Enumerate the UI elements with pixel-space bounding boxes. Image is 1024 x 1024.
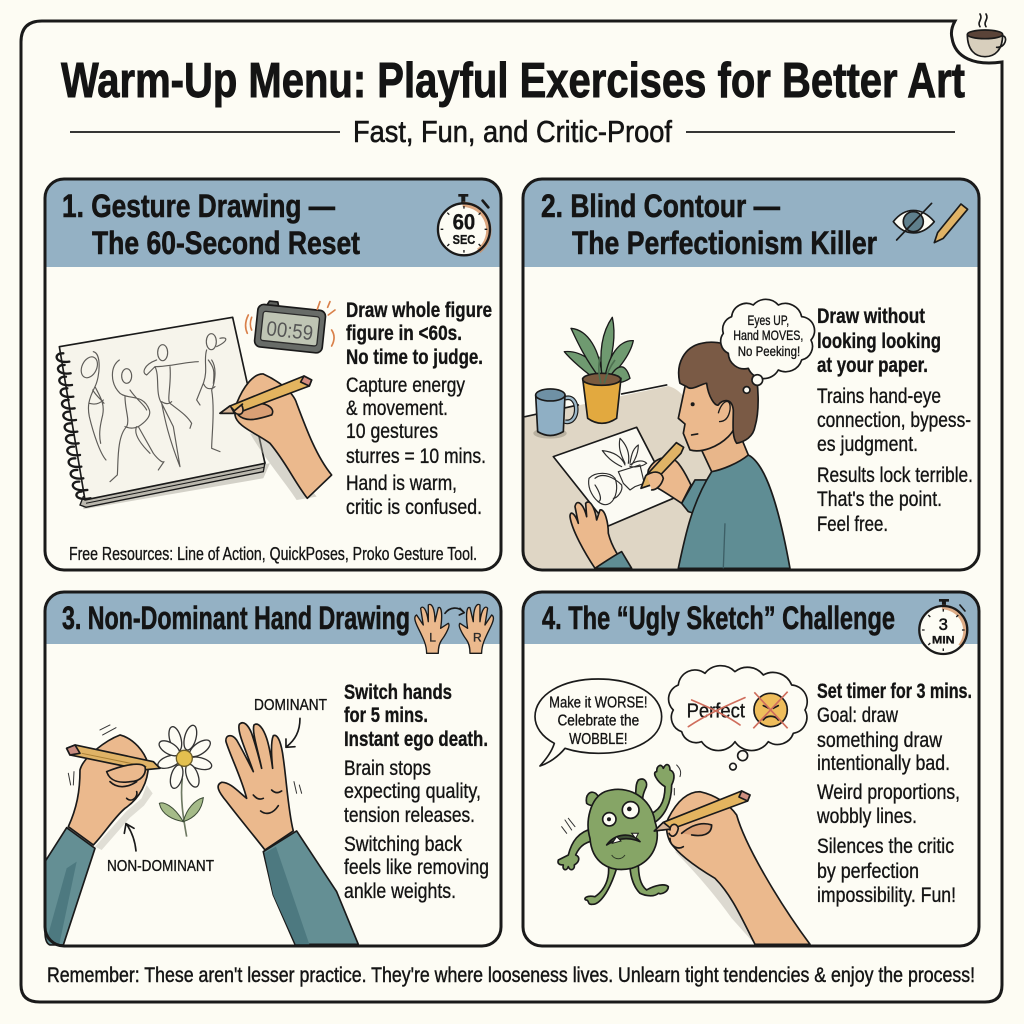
text block: gesture instructions: critic is confused.: [346, 496, 482, 519]
text block: gesture instructions: & movement.: [346, 397, 448, 420]
label: dominant: DOMINANT: [254, 697, 327, 714]
text block: non-dominant instructions: tension releases.: [344, 804, 475, 827]
text block: gesture instructions: figure in <60s.: [346, 322, 462, 345]
text block: gesture instructions: [346, 299, 492, 519]
text block: non-dominant instructions: ankle weights.: [344, 880, 456, 903]
text block: non-dominant instructions: Switch hands: [344, 681, 452, 704]
icon: crossed eye and pencil: [893, 203, 968, 243]
subtitle: Fast, Fun, and Critic-Proof: [353, 114, 672, 149]
text block: ugly sketch instructions: wobbly lines.: [816, 805, 917, 828]
text block: blind contour instructions: looking looking: [817, 330, 941, 353]
hand shadow: [675, 852, 755, 944]
text block: blind contour instructions: That's the point.: [817, 488, 942, 511]
timer: [254, 300, 327, 353]
hair: [679, 342, 758, 443]
text block: ugly sketch instructions: Set timer for 3 mins.: [817, 680, 972, 703]
icon: 60 second stopwatch: SEC: [453, 233, 475, 247]
drawing hand: [667, 792, 810, 944]
dominant hand: [218, 723, 293, 850]
neck and head: [700, 423, 748, 472]
text block: blind contour instructions: Draw without: [817, 305, 925, 328]
illustration: monster, bubbles and drawing hand: WOBBLE!: [569, 731, 627, 748]
monster body: [588, 789, 657, 869]
non-dominant hand: [68, 735, 148, 845]
monster limbs: [558, 765, 674, 904]
icon: 3 minute stopwatch: [919, 599, 967, 654]
illustration: sketchbook with gesture figures: [57, 300, 335, 509]
illustration: person drawing without looking: [523, 299, 815, 568]
text block: gesture instructions: Draw whole figure: [346, 299, 492, 322]
icon: left and right hands: [415, 604, 493, 653]
speech bubble: [535, 679, 662, 766]
daisy: [182, 778, 187, 837]
heading: blind contour: 2. Blind Contour —: [541, 188, 780, 224]
icon: 3 minute stopwatch: MIN: [932, 635, 955, 647]
drawing hand and pencil: [648, 457, 691, 503]
heading: gesture drawing: [62, 188, 360, 261]
text block: gesture instructions: No time to judge.: [346, 346, 483, 369]
text block: blind contour instructions: [817, 305, 973, 536]
text block: gesture instructions: Capture energy: [346, 374, 465, 397]
panel: ugly sketch: [523, 592, 979, 946]
illustration: monster, bubbles and drawing hand: Make it WORSE!: [549, 695, 647, 712]
icon: 60 second stopwatch: 60: [453, 209, 475, 234]
hand shadow: [95, 785, 153, 850]
text block: blind contour instructions: at your paper.: [817, 354, 928, 377]
left hand on paper: [570, 502, 628, 568]
heading: gesture drawing: The 60-Second Reset: [92, 225, 360, 261]
text block: non-dominant instructions: for 5 mins.: [344, 704, 428, 727]
text block: blind contour instructions: es judgment.: [817, 433, 918, 456]
arrows: [286, 718, 300, 747]
right sleeve: [263, 831, 358, 944]
illustration: monster, bubbles and drawing hand: Perfect: [687, 700, 745, 722]
panel: blind contour: [523, 179, 979, 570]
text block: ugly sketch instructions: by perfection: [817, 860, 919, 883]
body: [678, 455, 790, 568]
hand with pencil: [250, 433, 317, 500]
sleeve: [682, 480, 708, 517]
illustration: person drawing without looking: No Peeking!: [738, 343, 800, 359]
icon: 3 minute stopwatch: 3: [939, 615, 948, 634]
text block: non-dominant instructions: [344, 681, 489, 903]
illustration: monster, bubbles and drawing hand: [535, 666, 810, 944]
thought bubble: [721, 299, 815, 379]
heading: blind contour: [541, 188, 877, 261]
spiral binding: [57, 353, 91, 499]
icon: left and right hands: R: [473, 631, 482, 645]
pot: [583, 378, 621, 423]
text block: non-dominant instructions: Instant ego death.: [344, 728, 488, 751]
heading: gesture drawing: 1. Gesture Drawing —: [62, 188, 335, 224]
text block: blind contour instructions: Trains hand-eye: [817, 385, 941, 408]
text block: ugly sketch instructions: Weird proportions,: [817, 781, 960, 804]
illustration: hands and daisy: [45, 718, 358, 945]
illustration: monster, bubbles and drawing hand: Celebrate the: [557, 713, 639, 730]
icon: 60 second stopwatch: [438, 194, 490, 255]
text block: gesture instructions: Hand is warm,: [346, 472, 457, 495]
heading: ugly sketch: 4. The “Ugly Sketch” Challenge: [542, 600, 895, 636]
text block: ugly sketch instructions: impossibility. Fun!: [817, 884, 956, 907]
heading: non-dominant hand: 3. Non-Dominant Hand Drawing: [62, 600, 410, 636]
monster antennae: [586, 792, 608, 808]
paper: [553, 427, 673, 526]
text block: ugly sketch instructions: Silences the critic: [817, 835, 954, 858]
text block: non-dominant instructions: feels like removing: [344, 856, 489, 879]
panel: gesture drawing: [45, 179, 501, 570]
text block: blind contour instructions: Results lock terrible.: [817, 464, 973, 487]
label: non-dominant: NON-DOMINANT: [107, 858, 214, 875]
free resources note: Free Resources: Line of Action, QuickPoses, Proko Gesture Tool.: [69, 544, 477, 564]
thought cloud: [669, 666, 807, 751]
text block: ugly sketch instructions: something draw: [817, 729, 943, 752]
left sleeve: [45, 828, 95, 945]
icon: coffee cup: [967, 14, 1006, 57]
text block: blind contour instructions: connection, bypess-: [817, 409, 971, 432]
text block: gesture instructions: sturres = 10 mins.: [346, 445, 486, 468]
text block: ugly sketch instructions: intentionally bad.: [817, 752, 950, 775]
heading: blind contour: The Perfectionism Killer: [572, 225, 877, 261]
text block: blind contour instructions: Feel free.: [817, 513, 888, 536]
timer: 00:59: [265, 317, 314, 345]
text block: gesture instructions: 10 gestures: [346, 420, 438, 443]
illustration: person drawing without looking: Eyes UP,: [747, 312, 789, 328]
plant: [564, 317, 633, 383]
panel: non-dominant hand: [45, 592, 501, 946]
text block: non-dominant instructions: Brain stops: [344, 757, 431, 780]
gesture figures: [78, 334, 226, 482]
illustration: person drawing without looking: Hand MOVES,: [733, 327, 803, 343]
text block: non-dominant instructions: Switching back: [344, 833, 462, 856]
text block: ugly sketch instructions: Goal: draw: [817, 704, 899, 727]
text block: ugly sketch instructions: [816, 680, 972, 907]
icon: left and right hands: L: [429, 631, 436, 645]
text block: non-dominant instructions: expecting quality,: [344, 780, 481, 803]
mug: [533, 428, 567, 439]
